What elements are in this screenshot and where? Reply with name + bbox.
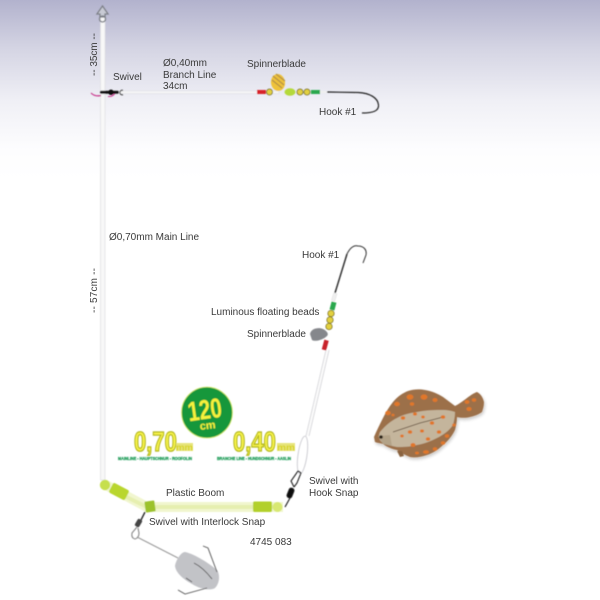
right leader line — [295, 350, 329, 474]
label: swivel with hook snap: Swivel with — [309, 476, 358, 487]
icon: top connector loop — [97, 6, 108, 22]
label: 0,70 mm mainline: mm — [176, 442, 193, 454]
label: branch line — [163, 58, 217, 92]
icon: hook snap swivel — [285, 471, 301, 507]
label: main line: Ø0,70mm Main Line — [109, 232, 199, 243]
right bead stack — [322, 301, 336, 350]
badge: 120 cm — [182, 387, 232, 438]
label: 0,70 mm mainline: 0,70 — [134, 427, 177, 458]
label: swivel: Swivel — [113, 72, 142, 83]
plastic boom — [100, 480, 283, 513]
badge: 120 cm: cm — [199, 419, 216, 433]
label: luminous beads: Luminous floating beads — [211, 307, 319, 318]
label: interlock snap: Swivel with Interlock Snap — [149, 517, 266, 528]
icon: top spinnerblade — [270, 73, 286, 92]
badge: 120 cm: 120 — [186, 393, 224, 428]
rig diagram — [91, 6, 485, 594]
label: 0,40 mm branch line: 0,40 — [233, 427, 276, 458]
icon: top hook — [327, 92, 379, 113]
top bead stack — [257, 88, 327, 96]
icon: top swivel — [91, 90, 123, 97]
label: 0,70 mm mainline — [118, 427, 193, 461]
icon: interlock snap — [132, 512, 145, 539]
label: plastic boom: Plastic Boom — [166, 488, 224, 499]
icon: right hook — [331, 246, 366, 301]
label: swivel with hook snap — [309, 476, 359, 499]
label: 0,40 mm branch line — [217, 427, 295, 461]
label: length 35cm: -- 35cm -- — [89, 33, 100, 76]
label: branch line: Ø0,40mm — [163, 58, 207, 69]
label: swivel with hook snap: Hook Snap — [309, 488, 359, 499]
label: 0,40 mm branch line: mm — [277, 442, 295, 454]
label: branch line: 34cm — [163, 81, 187, 92]
label: top spinnerblade: Spinnerblade — [247, 59, 306, 70]
label: article number: 4745 083 — [250, 537, 292, 548]
branch line — [104, 91, 279, 94]
label: top hook: Hook #1 — [319, 107, 357, 118]
main line — [100, 14, 105, 480]
sinker wire — [137, 537, 178, 558]
label: 0,70 mm mainline: MAINLINE - HAUPTSCHNUR - ROOFOLIN — [118, 456, 192, 461]
icon: grip sinker — [175, 546, 219, 594]
label: 0,40 mm branch line: BRANCHE LINE - HUNDSCHNUR - AASLIN — [217, 456, 291, 461]
label: right hook: Hook #1 — [302, 250, 340, 261]
icon: plaice fish — [374, 389, 485, 459]
label: branch line: Branch Line — [163, 70, 217, 81]
label: length 57cm: -- 57cm -- — [89, 268, 100, 313]
label: right spinnerblade: Spinnerblade — [247, 329, 306, 340]
icon: right spinnerblade — [310, 328, 328, 341]
